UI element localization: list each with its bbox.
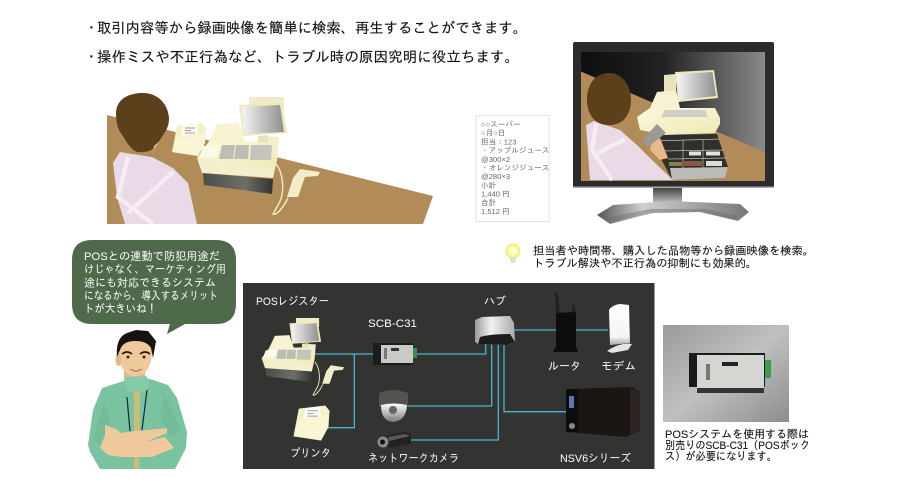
caption: search explanation bbox=[533, 244, 814, 270]
receipt card: @280×3 bbox=[481, 172, 510, 181]
receipt card: ○○スーパー bbox=[481, 120, 521, 129]
heading: feature bullets bbox=[84, 20, 527, 66]
icon: POS register small bbox=[262, 318, 321, 382]
caption: product note: 別売りのSCB-C31（POSボック bbox=[665, 439, 810, 452]
receipt card: 合計 bbox=[481, 198, 497, 207]
illustration: man with crossed arms bbox=[88, 330, 187, 469]
diagram labels: モデム bbox=[601, 360, 636, 373]
icon: POS register bbox=[197, 97, 287, 194]
diagram labels: プリンタ bbox=[290, 447, 331, 460]
monitor showing recorded footage bbox=[573, 42, 774, 224]
receipt card: 1,440 円 bbox=[481, 190, 510, 199]
diagram labels: NSV6シリーズ bbox=[560, 452, 631, 465]
caption: product note: ス）が必要になります。 bbox=[665, 450, 777, 463]
icon: network camera bbox=[378, 432, 411, 448]
speech bubble: トが大きいね！ bbox=[84, 302, 157, 316]
icon: SCB-C31 box bbox=[373, 343, 417, 365]
heading: feature bullets: ・ bbox=[84, 50, 99, 66]
receipt card bbox=[476, 116, 549, 222]
diagram labels: ネットワークカメラ bbox=[368, 452, 459, 465]
diagram labels: POSレジスター bbox=[256, 295, 329, 308]
receipt card: 担当：123 bbox=[481, 137, 516, 146]
speech bubble bbox=[72, 240, 236, 334]
icon: hub bbox=[475, 316, 515, 345]
diagram labels: ルータ bbox=[548, 360, 581, 373]
illustration: cashier at POS register bbox=[107, 93, 433, 224]
product photo: SCB-C31 bbox=[663, 325, 789, 422]
diagram labels: ハブ bbox=[484, 295, 507, 308]
speech bubble: になるから、導入するメリット bbox=[84, 290, 218, 302]
heading: feature bullets: 取引内容等から録画映像を簡単に検索、再生することができます。 bbox=[97, 20, 527, 37]
caption: product note: POSシステムを使用する際は bbox=[665, 428, 809, 441]
icon: dome camera bbox=[379, 390, 408, 422]
diagram labels: SCB-C31 bbox=[368, 318, 417, 330]
icon: modem bbox=[607, 304, 632, 353]
caption: search explanation: 担当者や時間帯、購入した品物等から録画映像を検索。 bbox=[533, 244, 814, 258]
icon: receipt printer bbox=[172, 123, 206, 156]
receipt card: ○月○日 bbox=[481, 129, 505, 138]
receipt card: ・アップルジュース bbox=[481, 146, 549, 155]
icon: printer small bbox=[294, 406, 330, 440]
icon: scanner small bbox=[313, 362, 344, 395]
speech bubble: 途にも対応できるシステム bbox=[84, 278, 216, 290]
heading: feature bullets: ・ bbox=[84, 21, 99, 37]
icon: NVR bbox=[566, 387, 640, 437]
diagram labels bbox=[256, 295, 636, 465]
receipt card: @300×2 bbox=[481, 155, 510, 164]
receipt card: ・オレンジジュース bbox=[481, 164, 549, 172]
connection lines bbox=[315, 330, 608, 440]
receipt card: 1,512 円 bbox=[481, 207, 510, 216]
icon: light bulb bbox=[506, 244, 520, 263]
caption: search explanation: トラブル解決や不正行為の抑制にも効果的。 bbox=[533, 257, 757, 270]
receipt card: 小計 bbox=[481, 181, 497, 190]
caption: product note bbox=[665, 428, 810, 463]
heading: feature bullets: 操作ミスや不正行為など、トラブル時の原因究明に役立ちます。 bbox=[97, 49, 519, 66]
panel: system diagram bbox=[243, 283, 654, 469]
icon: barcode scanner bbox=[273, 164, 320, 214]
speech bubble: POSとの連動で防犯用途だ bbox=[84, 250, 220, 263]
speech bubble: けじゃなく、マーケティング用 bbox=[84, 263, 226, 276]
icon: router bbox=[553, 293, 578, 352]
